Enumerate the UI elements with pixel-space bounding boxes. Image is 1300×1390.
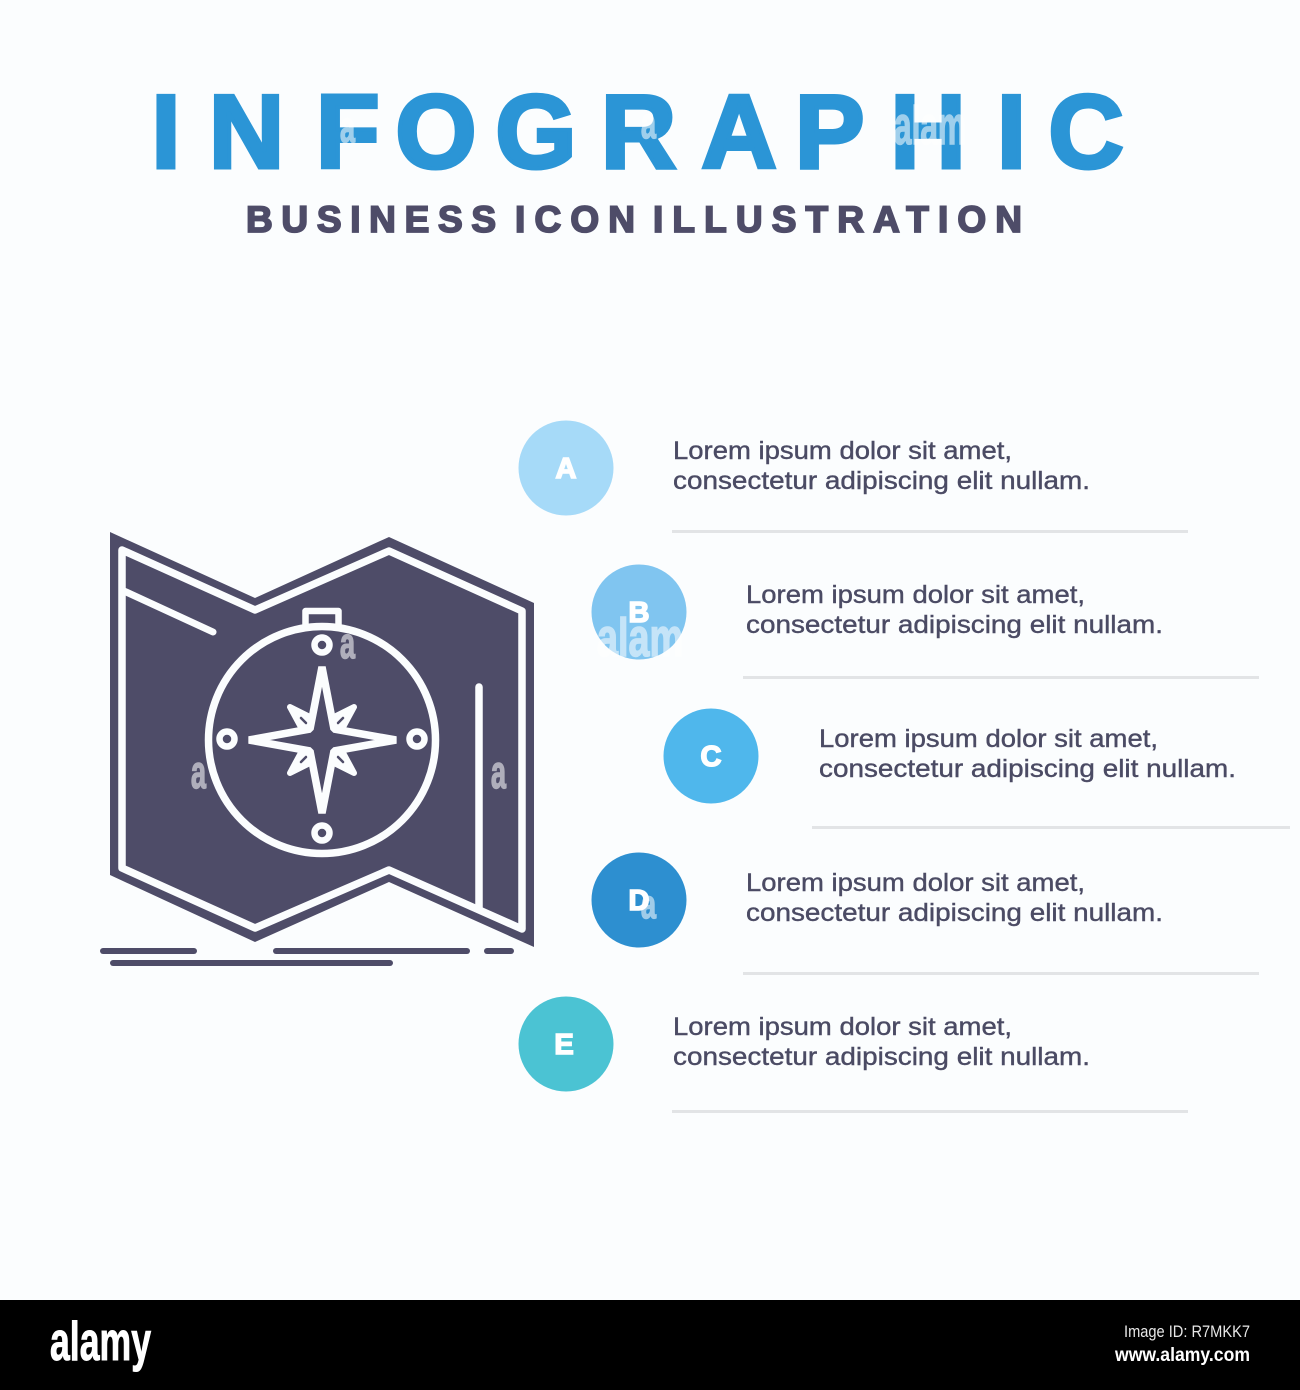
step C — [664, 708, 1290, 829]
map fold line left — [124, 591, 213, 632]
text B: Lorem ipsum dolor sit amet, — [746, 581, 1085, 609]
stock watermarks: a — [641, 883, 657, 927]
text E: Lorem ipsum dolor sit amet, — [673, 1013, 1012, 1041]
compass diagonal spikes — [290, 707, 354, 773]
badge E: E — [554, 1029, 574, 1061]
compass east marker — [410, 732, 424, 746]
stock watermarks: alam — [597, 608, 683, 668]
badge C — [664, 708, 758, 804]
compass south marker — [314, 826, 330, 840]
compass north marker — [314, 638, 330, 652]
compass ring — [208, 626, 436, 854]
badge C: C — [701, 741, 722, 773]
text A: consectetur adipiscing elit nullam. — [673, 467, 1090, 495]
text D: Lorem ipsum dolor sit amet, — [746, 869, 1085, 897]
text A — [673, 437, 1090, 495]
text A: Lorem ipsum dolor sit amet, — [673, 437, 1012, 465]
text C: consectetur adipiscing elit nullam. — [819, 755, 1236, 783]
badge D — [592, 852, 686, 948]
text E: consectetur adipiscing elit nullam. — [673, 1043, 1090, 1071]
badge B — [592, 564, 686, 660]
step A — [518, 420, 1188, 533]
compass west marker — [220, 732, 234, 746]
text B — [746, 581, 1163, 639]
stock watermarks: a — [340, 103, 355, 152]
text D — [746, 869, 1163, 927]
icon: folded map with compass — [103, 532, 534, 963]
step D — [592, 852, 1259, 975]
alamy logo: alamy — [50, 1310, 151, 1372]
text D: consectetur adipiscing elit nullam. — [746, 899, 1163, 927]
subtitle: BUSINESS ICON ILLUSTRATION: BUSINESS — [246, 199, 496, 240]
stock watermarks — [191, 96, 966, 927]
text E — [673, 1013, 1090, 1071]
footer bar — [0, 1300, 1300, 1390]
map sheet — [110, 532, 534, 947]
stock watermarks: a — [191, 746, 206, 798]
subtitle: BUSINESS ICON ILLUSTRATION — [246, 199, 1022, 240]
stock watermarks: alam — [894, 96, 966, 156]
text C: Lorem ipsum dolor sit amet, — [819, 725, 1158, 753]
badge E — [518, 996, 614, 1092]
badge A — [518, 420, 614, 516]
compass star — [249, 667, 396, 813]
badge B: B — [629, 597, 649, 629]
stock watermarks: a — [340, 619, 355, 668]
map inner outline — [122, 550, 522, 929]
step E — [518, 996, 1188, 1113]
stock watermarks: a — [491, 746, 506, 798]
title: INFOGRAPHIC: INFOGRAPHIC — [152, 74, 1124, 190]
step B — [592, 564, 1259, 679]
image id: Image ID: R7MKK7 — [1124, 1322, 1250, 1341]
subtitle: BUSINESS ICON ILLUSTRATION: ICON — [515, 199, 635, 240]
badge A: A — [556, 453, 577, 485]
compass loop — [306, 611, 338, 627]
subtitle: BUSINESS ICON ILLUSTRATION: ILLUSTRATION — [653, 199, 1022, 240]
compass — [208, 611, 436, 854]
stock watermarks: a — [641, 99, 656, 148]
map fold line right — [475, 687, 483, 908]
text B: consectetur adipiscing elit nullam. — [746, 611, 1163, 639]
website: www.alamy.com — [1114, 1345, 1250, 1366]
badge D: D — [629, 885, 649, 917]
ground lines — [103, 951, 511, 963]
text C — [819, 725, 1236, 783]
